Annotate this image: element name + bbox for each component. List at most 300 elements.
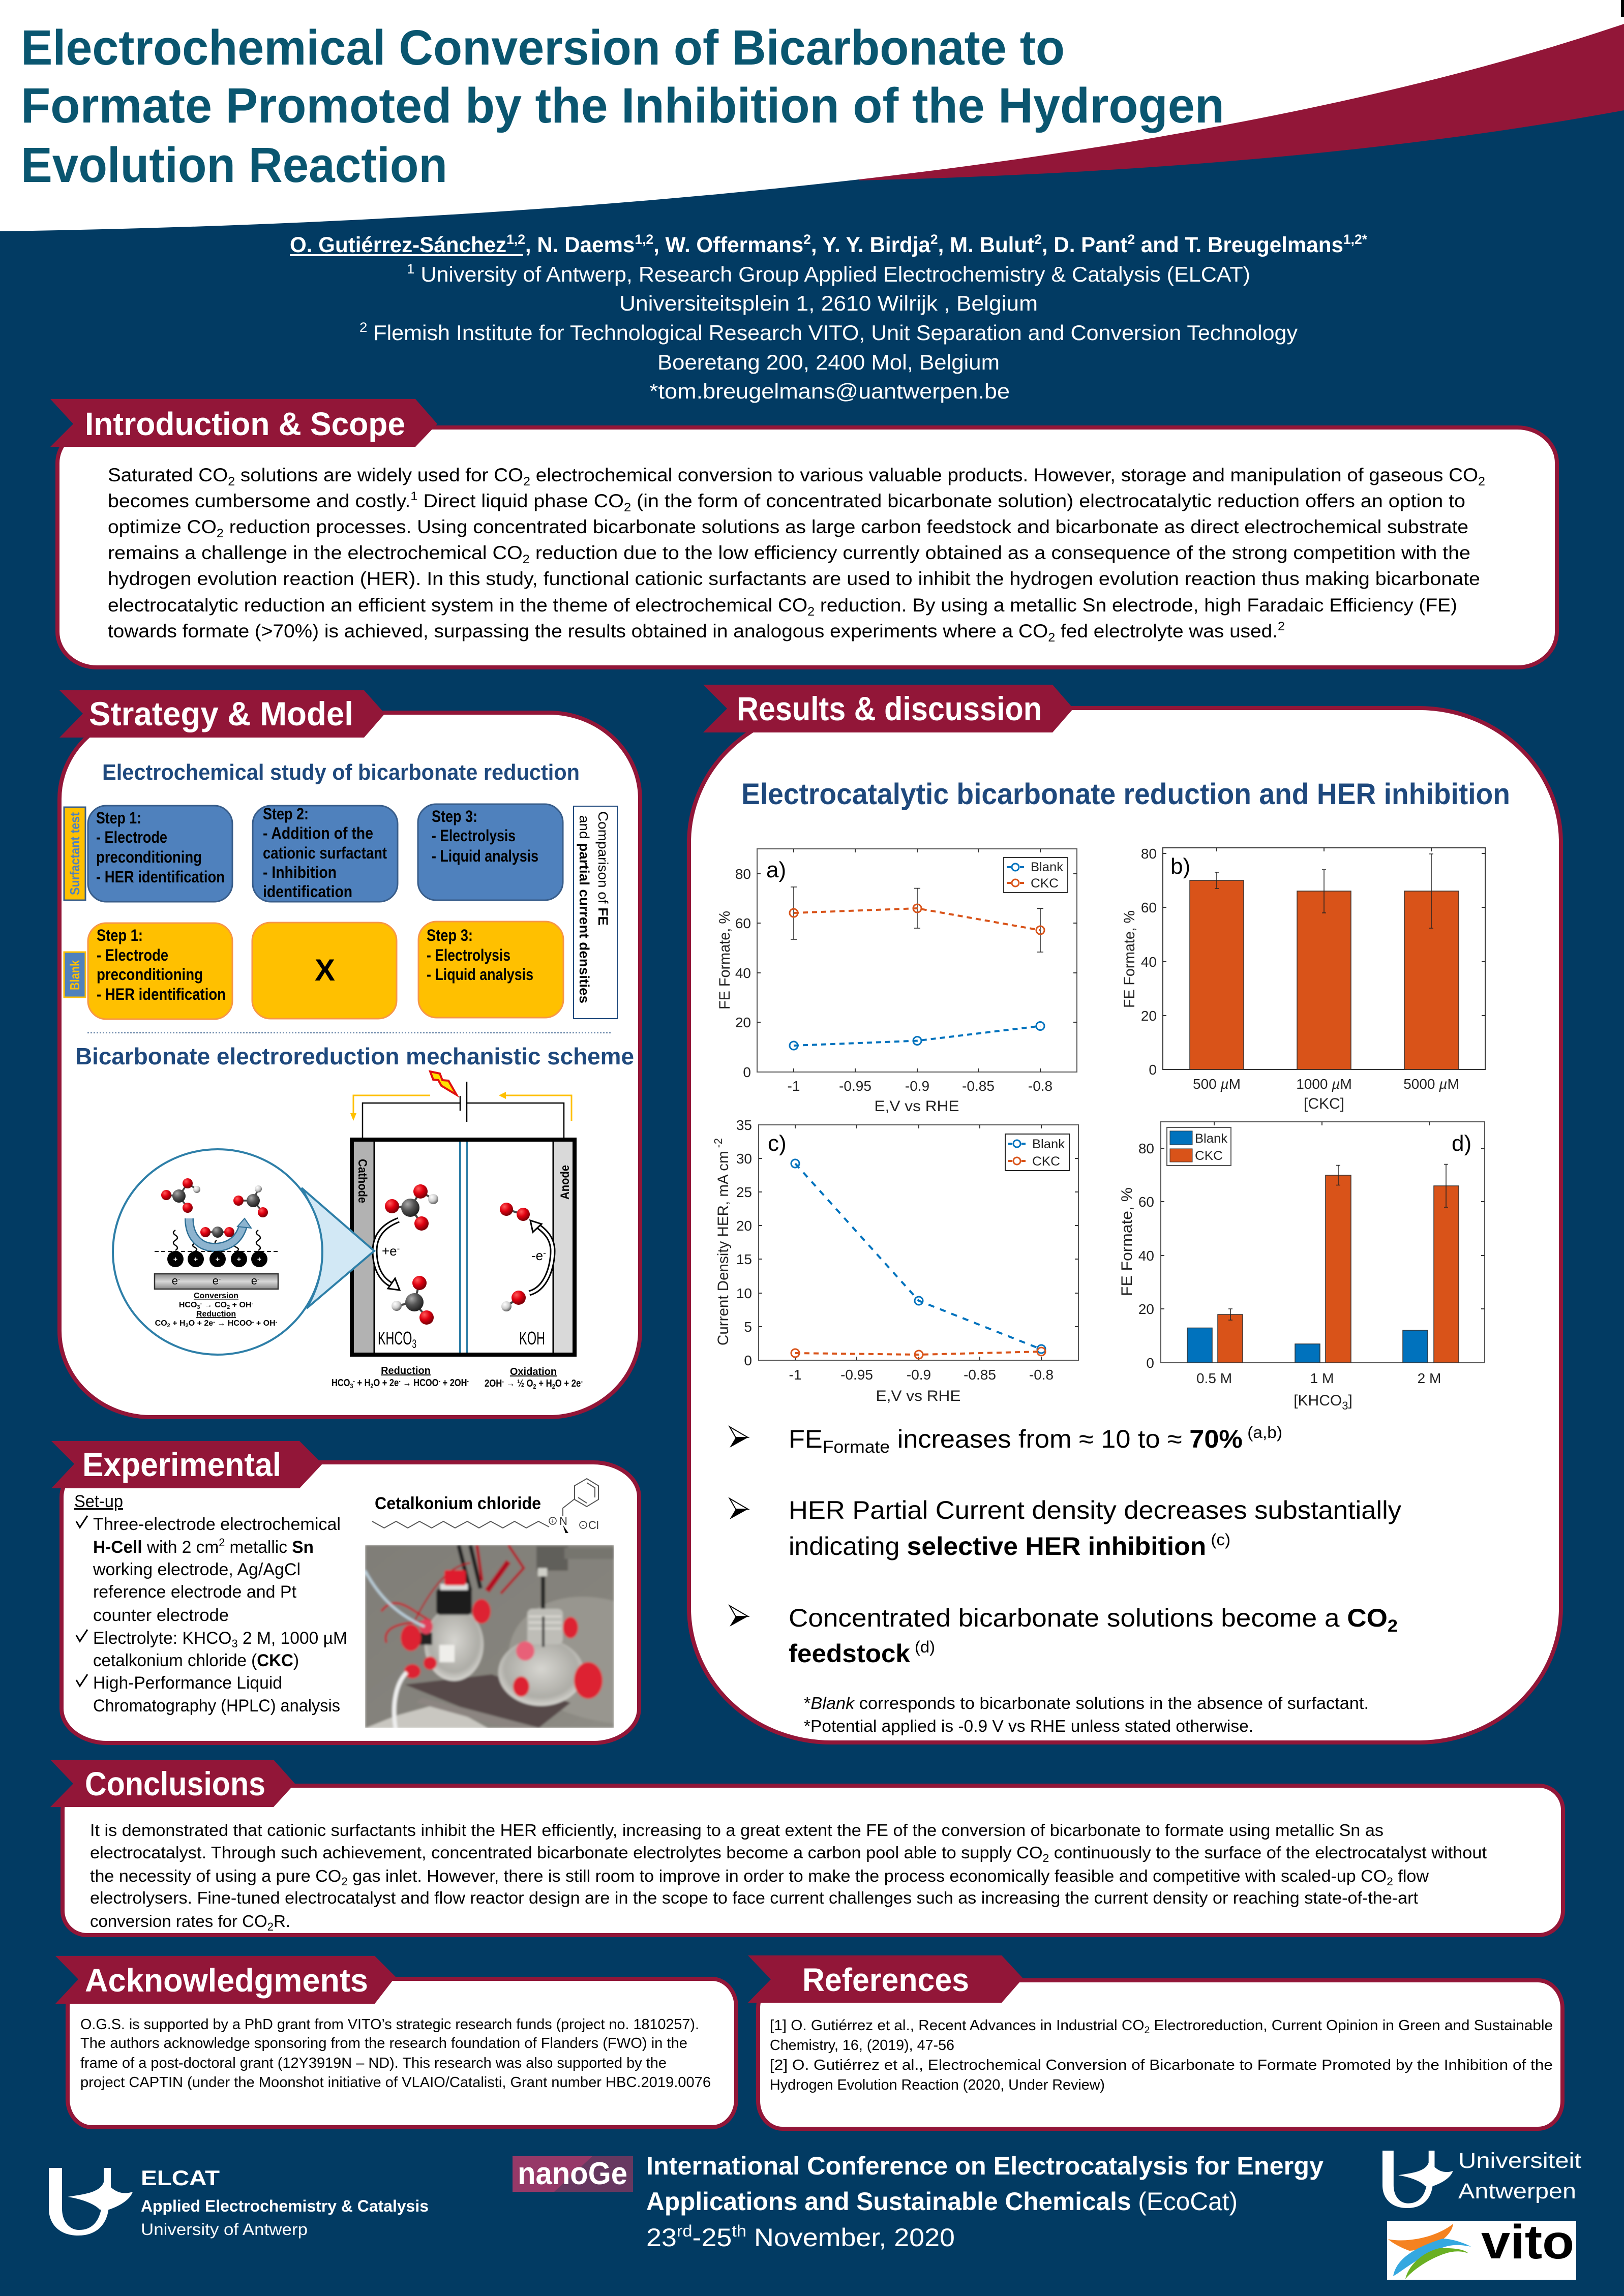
key findings <box>730 1423 1401 1668</box>
setup list: 2 <box>219 1536 225 1549</box>
step box: yellow step 3: - Liquid analysis <box>427 965 533 984</box>
chemical structure <box>372 1479 599 1533</box>
references text: Hydrogen Evolution Reaction (2020, Under Review) <box>770 2077 1105 2093</box>
half reactions: + 2OH <box>440 1377 467 1389</box>
conclusions text: 2 <box>1043 1852 1049 1864</box>
chart b: FE formate vs CKC concentration: 1000 µM <box>1296 1076 1352 1092</box>
zoomed surface circle: + <box>237 1255 241 1263</box>
half reactions: O + 2e <box>373 1377 399 1389</box>
conclusions text: conversion rates for CO <box>90 1912 267 1931</box>
introduction text: 2 <box>1048 631 1055 645</box>
conference details: rd <box>677 2222 693 2240</box>
footnotes: *Potential applied is -0.9 V vs RHE unless stated otherwise. <box>804 1717 1253 1735</box>
chart a: FE formate vs potential: -1 <box>788 1078 800 1094</box>
introduction text: 1 <box>410 489 418 503</box>
step box: blue step 2: - Inhibition <box>263 863 337 881</box>
footnotes: *Blank corresponds to bicarbonate solutions in the absence of surfactant. <box>804 1694 1369 1712</box>
introduction text: optimize CO <box>108 516 212 537</box>
bullet: CO2 feedstock: feedstock <box>789 1639 910 1668</box>
chart a: FE formate vs potential: Blank <box>1031 860 1064 874</box>
panel: experimental: Experimental <box>82 1446 281 1483</box>
acknowledgments text: O.G.S. is supported by a PhD grant from VITO’s strategic research funds (project no. 1810257). <box>80 2016 699 2033</box>
panel: acknowledgments: Acknowledgments <box>85 1962 368 1999</box>
bullet: FE formate: (a,b) <box>1243 1423 1282 1442</box>
photo: H-cell setup <box>365 1545 614 1728</box>
header curved banner <box>0 0 1624 231</box>
zoomed surface circle: 2 <box>167 1323 170 1329</box>
chart a: FE formate vs potential <box>716 849 1077 1115</box>
step box: blue step 2: Step 2: <box>263 805 309 823</box>
bullet: FE formate: 70% <box>1189 1425 1243 1453</box>
zoomed surface circle: + OH <box>254 1319 276 1328</box>
conclusions text: 2 <box>341 1875 348 1888</box>
zoomed surface circle: - <box>276 1319 278 1325</box>
introduction text: hydrogen evolution reaction (HER). In this study, functional cationic surfactants are used to inhibit the hydrogen evolution reaction thus making bicarbonate <box>108 568 1480 589</box>
diagram: electrochemical cell <box>350 1072 575 1355</box>
panel: strategy and model: Strategy & Model <box>89 695 353 732</box>
chart b: FE formate vs CKC concentration: 20 <box>1141 1008 1157 1024</box>
setup list: Chromatography (HPLC) analysis <box>93 1696 340 1716</box>
half reactions: - <box>581 1377 583 1385</box>
callout wedge <box>302 1188 374 1308</box>
authors and affiliations: 2 <box>359 320 367 335</box>
half reactions: + H <box>355 1377 371 1389</box>
authors and affiliations <box>290 232 1367 403</box>
diagram: electrochemical cell: KHCO <box>378 1328 431 1349</box>
chart d: FE formate vs KHCO3 concentration: 40 <box>1138 1248 1154 1264</box>
half reactions <box>332 1365 583 1390</box>
chart c: HER current density: E,V vs RHE <box>876 1388 961 1404</box>
chart d: FE formate vs KHCO3 concentration: FE Formate, % <box>1119 1187 1135 1296</box>
zoomed surface circle: e <box>213 1274 219 1287</box>
chart c: HER current density: -0.95 <box>840 1367 873 1383</box>
zoomed surface circle: → CO <box>202 1301 227 1309</box>
step box: yellow step 1 <box>88 923 232 1019</box>
chart c: HER current density: 35 <box>736 1117 752 1133</box>
authors and affiliations: 1,2 <box>635 232 653 247</box>
setup list: Set-up <box>74 1492 123 1511</box>
half reactions: - <box>502 1377 504 1385</box>
bullet: HER partial current: HER Partial Current density decreases substantially <box>789 1496 1401 1524</box>
introduction text: reduction due to the low efficiency currently obtained as a consequence of the strong competition with the <box>530 542 1470 563</box>
chemical structure: Cl <box>588 1519 599 1532</box>
step box: blue step 3: - Liquid analysis <box>432 847 538 865</box>
chart c: HER current density: 25 <box>736 1184 752 1200</box>
chart a: FE formate vs potential: a) <box>766 858 786 882</box>
chart d: FE formate vs KHCO3 concentration: d) <box>1452 1131 1471 1156</box>
heading: mechanistic scheme: Bicarbonate electroreduction mechanistic scheme <box>75 1043 634 1069</box>
half reactions: Oxidation <box>510 1366 557 1377</box>
setup list: Sn <box>292 1538 314 1557</box>
zoomed surface circle: Conversion <box>194 1292 238 1300</box>
chart a: FE formate vs potential: 60 <box>735 915 751 931</box>
setup list: reference electrode and Pt <box>93 1582 297 1602</box>
authors and affiliations: 2 <box>1034 232 1042 247</box>
label: blank <box>64 952 85 997</box>
label: blank: Blank <box>67 960 82 990</box>
step box: yellow X <box>252 923 397 1019</box>
heading: electrocatalytic bicarbonate reduction: Electrocatalytic bicarbonate reduction and HER inhibition <box>741 778 1510 811</box>
conference details: Applications and Sustainable Chemicals (EcoCat) <box>646 2187 1238 2216</box>
panel: references <box>748 1955 1562 2129</box>
diagram: electrochemical cell: 3 <box>412 1337 416 1351</box>
diagram: electrochemical cell: Cathode <box>355 1159 369 1203</box>
chart c: HER current density: -0.85 <box>964 1367 996 1383</box>
half reactions: 2 <box>552 1383 555 1390</box>
chart c: HER current density: -0.9 <box>907 1367 931 1383</box>
chart c: HER current density: 15 <box>736 1251 752 1267</box>
zoomed surface circle: + <box>194 1255 198 1263</box>
step box: yellow step 3: - Electrolysis <box>427 946 510 964</box>
setup list: cetalkonium chloride (CKC) <box>93 1651 299 1670</box>
introduction text: Direct liquid phase CO <box>418 491 624 511</box>
introduction text: reduction. By using a metallic Sn electrode, high Faradaic Efficiency (FE) <box>815 595 1457 616</box>
authors and affiliations: 1 <box>407 261 414 277</box>
panel: conclusions <box>50 1760 1563 1935</box>
authors and affiliations: 2 <box>1127 232 1135 247</box>
chart c: HER current density: 20 <box>736 1218 752 1234</box>
step box: yellow step 1: Step 1: <box>97 926 143 944</box>
logo: ELCAT: University of Antwerp <box>141 2220 308 2239</box>
step box: yellow step 1: preconditioning <box>97 965 203 984</box>
step box: yellow X: X <box>315 953 335 987</box>
step box: blue step 2: - Addition of the <box>263 824 373 842</box>
introduction text: reduction processes. Using concentrated bicarbonate solutions as large carbon feedstock and bicarbonate as direct electrochemical substrate <box>224 516 1468 537</box>
authors and affiliations: *tom.breugelmans@uantwerpen.be <box>649 379 1010 403</box>
zoomed surface circle: + <box>257 1255 261 1263</box>
step box: blue step 2: cationic surfactant <box>263 844 387 862</box>
bullet: FE formate: FE <box>789 1425 821 1453</box>
zoomed surface circle: 3 <box>197 1304 200 1310</box>
chart c: HER current density: -1 <box>789 1367 801 1383</box>
chart c: HER current density: -2 <box>712 1138 725 1151</box>
conclusions text: flow <box>1393 1866 1429 1885</box>
panel: conclusions: Conclusions <box>85 1765 265 1802</box>
zoomed surface circle: - <box>257 1275 259 1282</box>
chart c: HER current density: -0.8 <box>1029 1367 1054 1383</box>
chart c: HER current density: 0 <box>744 1353 752 1368</box>
zoomed surface circle: - <box>251 1301 253 1307</box>
chart d: FE formate vs KHCO3 concentration: 2 M <box>1418 1370 1441 1386</box>
chart c: HER current density: 30 <box>736 1151 752 1167</box>
half reactions: 3 <box>350 1382 353 1390</box>
heading: electrochemical study: Electrochemical study of bicarbonate reduction <box>102 760 580 785</box>
half reactions: 2 <box>533 1383 536 1390</box>
chart b: FE formate vs CKC concentration: FE Formate, % <box>1121 910 1138 1008</box>
diagram: electrochemical cell: -e <box>531 1248 543 1263</box>
step box: blue step 1: Step 1: <box>96 809 141 827</box>
bullet: HER partial current <box>730 1496 1401 1560</box>
label: surfactant test: Surfactant test <box>67 812 82 895</box>
setup list <box>74 1492 347 1716</box>
logo: VITO: vito <box>1481 2215 1574 2269</box>
half reactions: 2OH <box>485 1378 505 1389</box>
references text: [2] O. Gutiérrez et al., Electrochemical Conversion of Bicarbonate to Formate Promoted by the Inhibition of the <box>770 2057 1553 2073</box>
chart a: FE formate vs potential: -0.85 <box>962 1078 995 1094</box>
step box: blue step 2 <box>253 805 398 902</box>
authors and affiliations: , Y. Y. Birdja <box>811 233 931 257</box>
bullet: CO2 feedstock <box>730 1604 1398 1668</box>
half reactions: + H <box>536 1378 552 1389</box>
logo: ELCAT: ELCAT <box>141 2166 220 2190</box>
bullet: FE formate: increases from ≈ 10 to ≈ <box>890 1425 1189 1453</box>
introduction text: becomes cumbersome and costly. <box>108 491 392 511</box>
conclusions text: continuously to the surface of the electrocatalyst without <box>1049 1843 1487 1862</box>
chart a: FE formate vs potential: -0.9 <box>905 1078 929 1094</box>
introduction text: fed electrolyte was used. <box>1055 621 1278 641</box>
step box: blue step 3: - Electrolysis <box>432 826 516 845</box>
chart c: HER current density: Current Density HER, mA cm <box>715 1148 732 1345</box>
chart a: FE formate vs potential: CKC <box>1031 876 1059 891</box>
logo: Universiteit Antwerpen: Antwerpen <box>1458 2179 1576 2203</box>
authors and affiliations: 2 <box>930 232 938 247</box>
panel: results and discussion: Results & discussion <box>737 690 1042 727</box>
references text: 2 <box>1144 2025 1150 2036</box>
cetalkonium chloride label: Cetalkonium chloride <box>375 1494 541 1513</box>
chart c: HER current density: c) <box>768 1131 787 1156</box>
introduction text: electrochemical conversion to various valuable products. However, storage and manipulation of gaseous CO <box>530 465 1478 485</box>
introduction text: (in the form of concentrated bicarbonate solution) electrocatalytic reduction offers an option to <box>631 491 1465 511</box>
chart c: HER current density: CKC <box>1032 1154 1060 1169</box>
setup list: 3 <box>232 1637 238 1650</box>
step box: blue step 1: preconditioning <box>96 848 202 866</box>
chart d: FE formate vs KHCO3 concentration: [KHCO <box>1294 1392 1342 1409</box>
chart d: FE formate vs KHCO3 concentration: ] <box>1348 1392 1352 1409</box>
setup list: Three-electrode electrochemical <box>93 1515 341 1534</box>
conference details: International Conference on Electrocatalysis for Energy <box>646 2152 1324 2180</box>
bullet: FE formate: Formate <box>823 1437 890 1457</box>
chart b: FE formate vs CKC concentration: [CKC] <box>1304 1095 1344 1112</box>
logo: Universiteit Antwerpen <box>1382 2149 1581 2208</box>
zoomed surface circle: Reduction <box>196 1310 236 1319</box>
chart c: HER current density <box>712 1117 1078 1404</box>
zoomed surface circle: + <box>173 1255 177 1263</box>
references text <box>770 2017 1553 2093</box>
conclusions text <box>90 1821 1487 1933</box>
authors and affiliations: 1,2 <box>506 232 525 247</box>
authors and affiliations: , N. Daems <box>525 233 635 257</box>
zoomed surface circle: CO <box>155 1319 167 1328</box>
diagram: electrochemical cell: KOH <box>519 1328 545 1349</box>
chemical structure: - <box>582 1521 585 1529</box>
chart d: FE formate vs KHCO3 concentration: 60 <box>1138 1194 1154 1210</box>
introduction text: 2 <box>624 501 631 514</box>
conference details: 23 <box>646 2223 675 2252</box>
chart c: HER current density: Blank <box>1032 1137 1065 1151</box>
authors and affiliations: , M. Bulut <box>938 233 1034 257</box>
panel: results and discussion <box>689 685 1561 1742</box>
zoomed surface circle: e <box>172 1274 178 1287</box>
label: surfactant test <box>64 807 85 900</box>
chart d: FE formate vs KHCO3 concentration: 1 M <box>1310 1370 1334 1386</box>
step box: yellow step 3 <box>418 922 563 1018</box>
setup list: Electrolyte: KHCO <box>93 1629 233 1648</box>
introduction text: towards formate (>70%) is achieved, surpassing the results obtained in analogous experiments where a CO <box>108 621 1005 641</box>
chart d: FE formate vs KHCO3 concentration: 20 <box>1138 1301 1154 1317</box>
step box: blue step 2: identification <box>263 882 352 901</box>
chart a: FE formate vs potential: 40 <box>735 965 751 981</box>
setup list: working electrode, Ag/AgCl <box>93 1560 300 1579</box>
conference details: th <box>732 2222 746 2240</box>
references text: Chemistry, 16, (2019), 47-56 <box>770 2037 954 2054</box>
introduction text: 2 <box>523 475 530 488</box>
authors and affiliations: 2 <box>803 232 811 247</box>
acknowledgments text: project CAPTIN (under the Moonshot initiative of VLAIO/Catalisti, Grant number HBC.2019.0076 <box>80 2074 711 2091</box>
zoomed surface circle: - <box>213 1319 215 1325</box>
authors and affiliations: and T. Breugelmans <box>1135 233 1343 257</box>
authors and affiliations: 1,2* <box>1343 232 1367 247</box>
half reactions: 2 <box>371 1382 373 1390</box>
comparison box <box>574 806 617 1019</box>
conclusions text: R. <box>274 1912 290 1931</box>
introduction text <box>108 465 1485 645</box>
authors and affiliations: Boeretang 200, 2400 Mol, Belgium <box>657 350 1000 374</box>
conclusions text: It is demonstrated that cationic surfactants inhibit the HER efficiently, increasing to a great extent the FE of the conversion of bicarbonate to formate using metallic Sn as <box>90 1821 1384 1840</box>
panel: strategy and model <box>59 690 640 1417</box>
acknowledgments text <box>80 2016 711 2091</box>
conclusions text: the necessity of using a pure CO <box>90 1866 334 1885</box>
chart b: FE formate vs CKC concentration <box>1121 846 1485 1112</box>
chart b: FE formate vs CKC concentration: 40 <box>1141 954 1157 970</box>
conclusions text: electrocatalyst. Through such achievement, concentrated bicarbonate electrolytes become a carbon pool able to supply CO <box>90 1843 1006 1862</box>
diagram: electrochemical cell: - <box>543 1248 546 1258</box>
step box: yellow step 1: - Electrode <box>97 946 168 964</box>
chart b: FE formate vs CKC concentration: 80 <box>1141 846 1157 862</box>
introduction text: 2 <box>217 527 224 540</box>
introduction text: 2 <box>807 605 815 619</box>
panel: references: References <box>802 1962 969 1998</box>
logo: VITO <box>1387 2215 1576 2280</box>
zoomed surface circle: + H <box>170 1319 186 1328</box>
conclusions text: gas inlet. However, there is still room to improve in order to make the process economically feasible and competitive with scaled-up CO <box>348 1866 1387 1885</box>
footnotes <box>804 1694 1369 1735</box>
title: Electrochemical Conversion of Bicarbonate to <box>21 20 1065 75</box>
chart a: FE formate vs potential: 80 <box>735 866 751 882</box>
chart d: FE formate vs KHCO3 concentration: 3 <box>1342 1399 1348 1412</box>
comparison box: and partial current densities <box>577 815 592 1003</box>
bullet: HER partial current: indicating selective HER inhibition <box>789 1532 1196 1560</box>
references text: Electroreduction, Current Opinion in Green and Sustainable <box>1150 2017 1553 2034</box>
panel: introduction and scope <box>50 399 1557 667</box>
chart c: HER current density: 5 <box>744 1319 752 1335</box>
zoomed surface circle: e <box>251 1274 257 1287</box>
chart a: FE formate vs potential: E,V vs RHE <box>875 1098 959 1115</box>
logo: nanoGe: nanoGe <box>518 2156 627 2191</box>
panel: experimental <box>51 1441 639 1743</box>
molecules in cell <box>385 1184 530 1325</box>
setup list: H-Cell with 2 cm <box>93 1538 220 1557</box>
zoomed surface circle <box>113 1149 322 1355</box>
chemical structure: N <box>559 1515 567 1527</box>
authors and affiliations: O. Gutiérrez-Sánchez <box>290 233 511 257</box>
half reactions: → HCOO <box>401 1377 438 1389</box>
chart c: HER current density: 10 <box>736 1285 752 1301</box>
half reactions: - <box>467 1377 469 1385</box>
introduction text: Saturated CO <box>108 465 223 485</box>
chart d: FE formate vs KHCO3 concentration: Blank <box>1195 1131 1228 1146</box>
conference details: November, 2020 <box>746 2223 955 2252</box>
logo: ELCAT <box>49 2166 429 2239</box>
authors and affiliations: , W. Offermans <box>653 233 803 257</box>
diagram: electrochemical cell: +e <box>382 1243 397 1259</box>
zoomed surface circle: + <box>216 1255 220 1263</box>
step box: blue step 3 <box>418 804 563 900</box>
setup list: High-Performance Liquid <box>93 1673 282 1693</box>
introduction text: 2 <box>1278 620 1285 633</box>
zoomed surface circle: - <box>219 1275 221 1282</box>
references text: [1] O. Gutiérrez et al., Recent Advances in Industrial CO <box>770 2017 1135 2034</box>
conference details: -25 <box>693 2223 732 2252</box>
acknowledgments text: frame of a post-doctoral grant (12Y3919N – ND). This research was also supported by the <box>80 2055 667 2071</box>
zoomed surface circle: - <box>252 1319 254 1325</box>
authors and affiliations: Flemish Institute for Technological Research VITO, Unit Separation and Conversion Technology <box>367 321 1298 345</box>
half reactions: → ½ O <box>504 1378 533 1389</box>
chart d: FE formate vs KHCO3 concentration: 0 <box>1146 1355 1154 1371</box>
zoomed surface circle: 2 <box>186 1323 189 1329</box>
zoomed surface circle: 2 <box>227 1304 230 1310</box>
conclusions text: 2 <box>1387 1875 1393 1888</box>
setup list: 2 M, 1000 µM <box>238 1629 347 1648</box>
chart d: FE formate vs KHCO3 concentration: 0.5 M <box>1196 1370 1232 1386</box>
zoomed surface circle: - <box>178 1275 180 1282</box>
setup list: counter electrode <box>93 1606 229 1625</box>
authors and affiliations: University of Antwerp, Research Group Applied Electrochemistry & Catalysis (ELCAT) <box>414 262 1250 286</box>
chart a: FE formate vs potential: 0 <box>743 1064 751 1080</box>
bullet: FE formate <box>730 1423 1282 1457</box>
setup list: metallic <box>225 1538 292 1557</box>
chart b: FE formate vs CKC concentration: 500 µM <box>1193 1076 1241 1092</box>
conference details <box>646 2152 1324 2252</box>
half reactions: Reduction <box>381 1365 431 1376</box>
half reactions: - <box>399 1377 401 1385</box>
title <box>21 20 1224 193</box>
authors and affiliations: Universiteitsplein 1, 2610 Wilrijk , Belgium <box>619 291 1038 315</box>
chart b: FE formate vs CKC concentration: 0 <box>1149 1062 1157 1078</box>
chart d: FE formate vs KHCO3 concentration: CKC <box>1195 1149 1223 1163</box>
logo: ELCAT: Applied Electrochemistry & Catalysis <box>141 2197 429 2215</box>
chart a: FE formate vs potential: -0.95 <box>839 1078 871 1094</box>
authors and affiliations: , D. Pant <box>1042 233 1127 257</box>
zoomed surface circle: O + 2e <box>189 1319 213 1328</box>
zoomed surface circle: + OH <box>230 1301 251 1309</box>
bullet: CO2 feedstock: Concentrated bicarbonate solutions become a CO <box>789 1604 1385 1632</box>
introduction text: electrocatalytic reduction an efficient system in the theme of electrochemical CO <box>108 595 774 616</box>
step box: yellow step 1: - HER identification <box>97 985 226 1003</box>
chart b: FE formate vs CKC concentration: 5000 µM <box>1403 1076 1459 1092</box>
chart b: FE formate vs CKC concentration: 60 <box>1141 900 1157 915</box>
introduction text: 2 <box>228 475 235 488</box>
half reactions: HCO <box>332 1377 354 1389</box>
chart a: FE formate vs potential: FE Formate, % <box>716 911 733 1009</box>
conclusions text: 2 <box>267 1920 274 1933</box>
half reactions: - <box>438 1377 440 1385</box>
diagram: electrochemical cell: - <box>397 1244 400 1253</box>
bullet: HER partial current: (c) <box>1206 1530 1230 1549</box>
zoomed surface circle: - <box>200 1301 202 1307</box>
comparison box: Comparison of FE <box>595 811 611 926</box>
introduction text: 2 <box>523 553 530 566</box>
panel: introduction and scope: Introduction & Scope <box>85 406 405 442</box>
chart a: FE formate vs potential: -0.8 <box>1028 1078 1052 1094</box>
bullet: CO2 feedstock: 2 <box>1388 1616 1398 1636</box>
zoomed surface circle: → HCOO <box>215 1319 252 1328</box>
introduction text: solutions are widely used for CO <box>235 465 523 485</box>
step box: blue step 1: - Electrode <box>96 828 167 846</box>
chart a: FE formate vs potential: 20 <box>735 1015 751 1030</box>
chart d: FE formate vs KHCO3 concentration <box>1119 1122 1485 1412</box>
title: Evolution Reaction <box>21 137 447 193</box>
zoomed surface circle: HCO <box>179 1301 197 1309</box>
